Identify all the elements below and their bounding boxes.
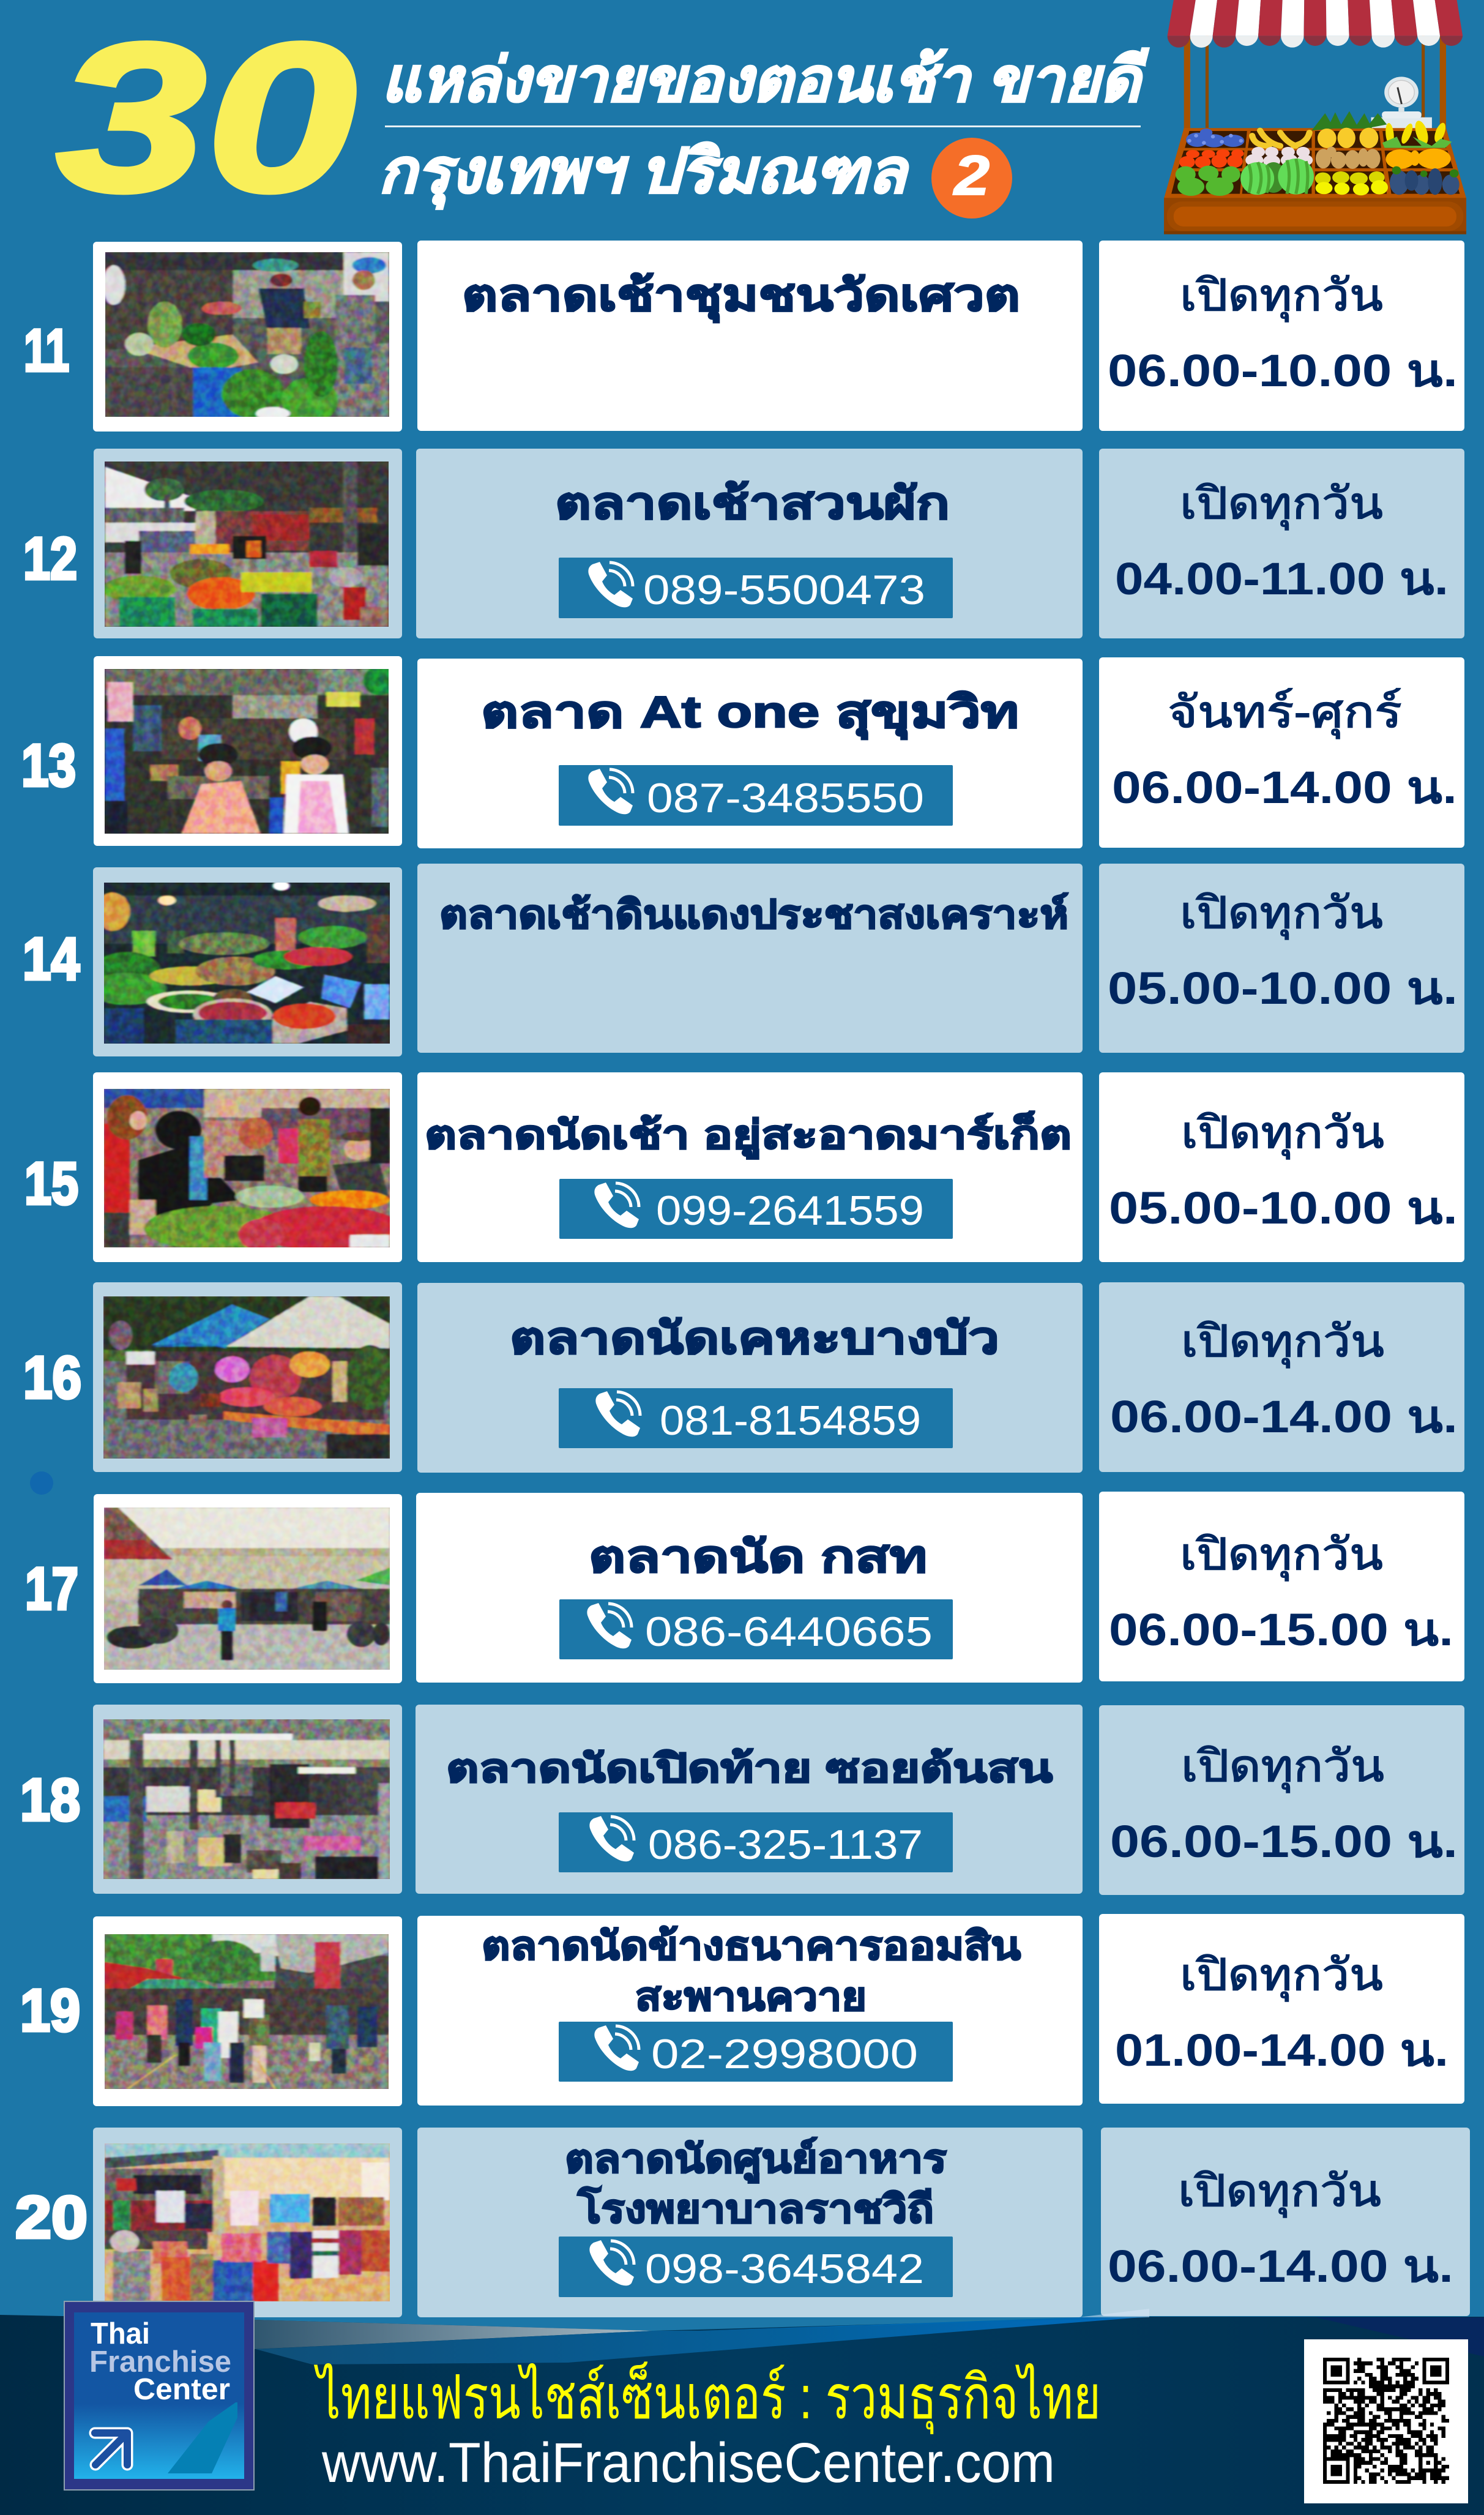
row 19 xyxy=(20,1914,1464,2106)
grapes xyxy=(1186,129,1244,148)
photo: clothing stall xyxy=(105,2143,390,2301)
row number: 15 xyxy=(24,1150,78,1217)
title: line two: กรุงเทพฯ ปริมณฑล xyxy=(378,137,909,209)
phone number: 087-3485550 xyxy=(647,775,924,821)
photo panel xyxy=(93,1072,402,1262)
tomatoes xyxy=(1179,149,1244,168)
photo: vendors at stall xyxy=(105,669,389,834)
icon: phone xyxy=(594,2025,639,2071)
icon: phone xyxy=(587,1603,632,1648)
row number: 13 xyxy=(21,732,76,799)
lettuce xyxy=(1176,166,1240,196)
footer: Thai name: ไทยแฟรนไชส์เซ็นเตอร์ : รวมธุรกิจไทย xyxy=(314,2361,1101,2435)
row 12 xyxy=(23,449,1464,638)
logo: Thai Franchise Center: Thai xyxy=(91,2317,150,2350)
market name: ตลาดเช้าชุมชนวัดเศวต xyxy=(462,271,1020,323)
name panel xyxy=(417,864,1083,1053)
name panel xyxy=(416,1493,1083,1683)
scale xyxy=(1371,77,1432,130)
hours panel xyxy=(1101,2128,1470,2316)
phone number: 089-5500473 xyxy=(643,567,925,613)
photo panel xyxy=(93,1916,402,2106)
QR code xyxy=(1304,2339,1468,2503)
phone number: 098-3645842 xyxy=(645,2246,924,2292)
phone bar xyxy=(559,765,953,826)
market name: ตลาดนัดข้างธนาคารออมสิน xyxy=(482,1924,1021,1968)
opening days: เปิดทุกวัน xyxy=(1180,889,1383,940)
photo panel xyxy=(94,1494,402,1683)
phone number: 02-2998000 xyxy=(651,2031,918,2077)
photo: tents at weekend market xyxy=(103,1296,390,1459)
photo panel xyxy=(94,449,402,638)
hours panel xyxy=(1099,864,1464,1053)
opening hours: 05.00-10.00 น. xyxy=(1108,963,1458,1014)
opening hours: 01.00-14.00 น. xyxy=(1115,2025,1449,2076)
hours panel xyxy=(1099,1282,1464,1472)
market name: ตลาดนัด กสท xyxy=(589,1533,927,1582)
footer band xyxy=(0,2309,1484,2515)
photo panel xyxy=(94,656,402,846)
photo: shoppers at fruit stall xyxy=(104,1089,390,1247)
row number: 16 xyxy=(23,1344,81,1411)
opening hours: 04.00-11.00 น. xyxy=(1115,553,1449,604)
market name: ตลาดนัดศูนย์อาหาร xyxy=(565,2137,947,2183)
photo: night produce market xyxy=(104,883,390,1044)
footer: website: www.ThaiFranchiseCenter.com xyxy=(321,2432,1055,2494)
icon: phone xyxy=(594,1183,639,1228)
photo panel xyxy=(93,1705,402,1894)
photo: covered market with fruit xyxy=(105,462,389,627)
market name xyxy=(565,2137,947,2231)
photo panel xyxy=(93,242,402,432)
hours panel xyxy=(1099,449,1464,638)
market name: ตลาดเช้าดินแดงประชาสงเคราะห์ xyxy=(439,892,1068,936)
row number: 12 xyxy=(23,525,77,592)
phone bar xyxy=(559,558,953,618)
market name: สะพานควาย xyxy=(635,1975,867,2019)
logo: Thai Franchise Center: Center xyxy=(133,2373,230,2406)
market name: ตลาดนัดเช้า อยู่สะอาดมาร์เก็ต xyxy=(425,1112,1072,1159)
hours panel xyxy=(1099,1072,1464,1262)
decorative blue dot xyxy=(30,1471,53,1495)
row number: 17 xyxy=(25,1555,78,1622)
row number: 14 xyxy=(23,925,80,992)
hours panel xyxy=(1099,241,1464,431)
row 15 xyxy=(24,1072,1464,1262)
hours panel xyxy=(1099,657,1464,848)
row number: 20 xyxy=(15,2184,88,2251)
icon: phone xyxy=(588,562,633,607)
opening days: จันทร์-ศุกร์ xyxy=(1168,688,1402,739)
name panel xyxy=(416,1705,1083,1894)
photo: canopy market with crowd xyxy=(104,1508,390,1670)
watermelons xyxy=(1240,159,1314,195)
market name: ตลาด At one สุขุมวิท xyxy=(481,688,1019,740)
market name: ตลาดนัดเปิดท้าย ซอยต้นสน xyxy=(446,1746,1053,1790)
name panel xyxy=(417,2128,1083,2317)
opening days: เปิดทุกวัน xyxy=(1180,1530,1383,1581)
opening days: เปิดทุกวัน xyxy=(1181,1108,1384,1159)
pumpkins xyxy=(1385,149,1451,169)
opening hours: 05.00-10.00 น. xyxy=(1109,1183,1458,1233)
market name: โรงพยาบาลราชวิถี xyxy=(577,2186,934,2231)
photo panel xyxy=(93,1282,402,1472)
name panel xyxy=(417,1072,1083,1262)
lemons xyxy=(1315,171,1385,185)
opening hours: 06.00-14.00 น. xyxy=(1112,762,1457,813)
phone number: 086-325-1137 xyxy=(648,1822,923,1868)
row 13 xyxy=(21,656,1464,848)
opening days: เปิดทุกวัน xyxy=(1180,1951,1383,2001)
phone bar xyxy=(559,1388,953,1448)
opening hours: 06.00-10.00 น. xyxy=(1108,345,1458,396)
name panel xyxy=(417,1283,1083,1473)
bananas xyxy=(1252,130,1310,146)
hours panel xyxy=(1099,1914,1464,2104)
title divider xyxy=(385,125,1141,127)
row number: 19 xyxy=(20,1977,80,2044)
title: big number 30: 30 xyxy=(56,0,356,236)
name panel xyxy=(417,1916,1083,2106)
opening days: เปิดทุกวัน xyxy=(1181,1742,1384,1793)
opening hours: 06.00-15.00 น. xyxy=(1109,1604,1453,1655)
photo panel xyxy=(93,867,402,1056)
row 11 xyxy=(24,241,1464,432)
market name xyxy=(482,1924,1021,2019)
market name: ตลาดเช้าสวนผัก xyxy=(555,479,950,528)
opening hours: 06.00-15.00 น. xyxy=(1110,1816,1458,1867)
icon: phone xyxy=(595,1391,640,1437)
icon: phone xyxy=(589,1816,634,1861)
logo: Thai Franchise Center: Franchise xyxy=(89,2345,231,2379)
name panel xyxy=(416,449,1083,638)
hours panel xyxy=(1099,1705,1464,1895)
opening hours: 06.00-14.00 น. xyxy=(1110,1391,1458,1442)
row 14 xyxy=(23,864,1464,1056)
phone bar xyxy=(559,1812,953,1872)
phone bar xyxy=(559,2022,953,2082)
pineapples xyxy=(1311,111,1387,130)
eggplants xyxy=(1390,168,1460,195)
phone number: 081-8154859 xyxy=(660,1397,921,1444)
title: line one: แหล่งขายของตอนเช้า ขายดี xyxy=(381,46,1149,114)
garlic xyxy=(1245,147,1313,167)
potatoes xyxy=(1316,147,1381,169)
row 18 xyxy=(20,1705,1464,1895)
phone bar xyxy=(559,2237,953,2297)
opening days: เปิดทุกวัน xyxy=(1178,2167,1381,2218)
row 20 xyxy=(15,2128,1470,2317)
row 17 xyxy=(25,1492,1464,1683)
opening days: เปิดทุกวัน xyxy=(1180,479,1383,530)
row number: 18 xyxy=(20,1766,80,1833)
hours panel xyxy=(1099,1492,1464,1681)
photo: indoor market from above xyxy=(103,1719,390,1879)
photo panel xyxy=(93,2128,402,2317)
opening hours: 06.00-14.00 น. xyxy=(1108,2241,1453,2292)
opening days: เปิดทุกวัน xyxy=(1180,271,1383,322)
logo: Thai Franchise Center xyxy=(64,2301,254,2490)
opening days: เปิดทุกวัน xyxy=(1181,1317,1384,1368)
market name: ตลาดนัดเคหะบางบัว xyxy=(510,1314,999,1363)
icon: market stall xyxy=(1164,0,1466,234)
photo: vegetable market xyxy=(105,252,389,417)
phone bar xyxy=(559,1599,953,1659)
icon: phone xyxy=(589,2240,634,2285)
row number: 11 xyxy=(24,317,69,384)
name panel xyxy=(417,659,1083,848)
icon: phone xyxy=(588,769,633,814)
phone number: 099-2641559 xyxy=(656,1187,924,1234)
phone bar xyxy=(559,1179,953,1239)
part number badge: 2 xyxy=(953,144,990,207)
phone number: 086-6440665 xyxy=(645,1609,933,1655)
part number badge xyxy=(931,138,1012,219)
row 16 xyxy=(23,1282,1464,1473)
name panel xyxy=(417,241,1083,431)
corn xyxy=(1385,119,1448,146)
photo: street market crowd xyxy=(105,1934,389,2089)
